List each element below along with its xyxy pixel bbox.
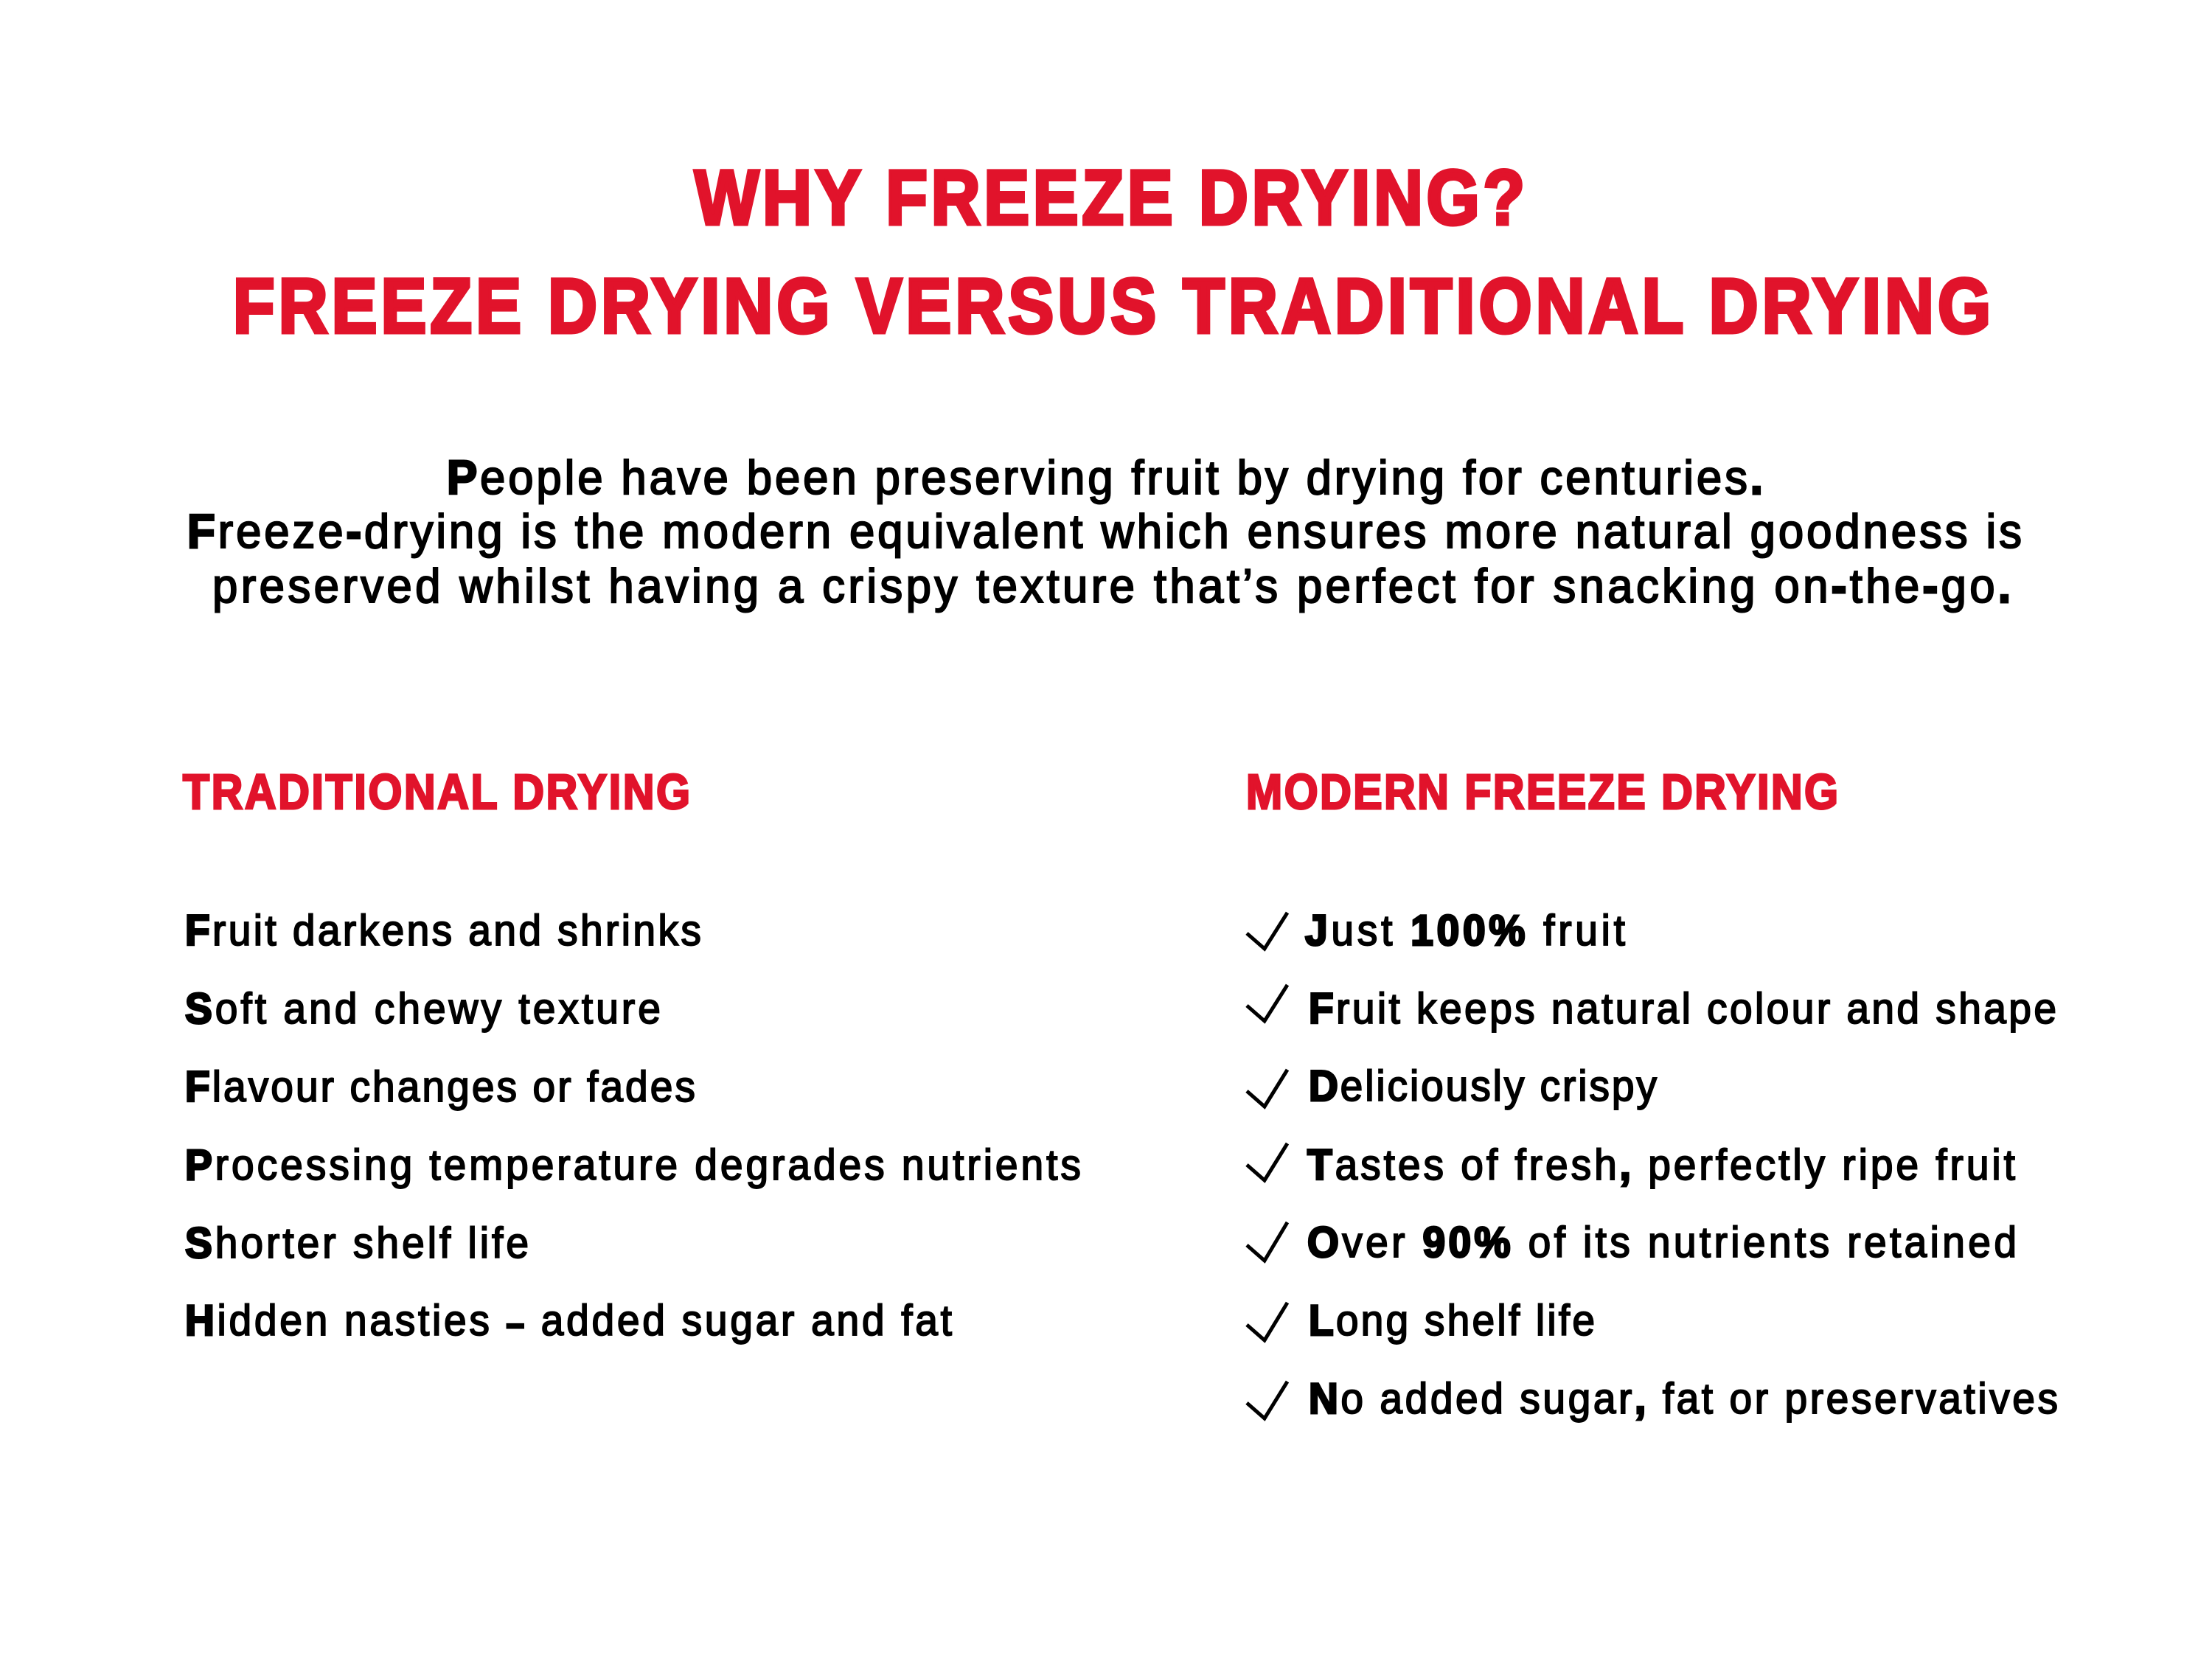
panel: modern freeze drying — [1246, 765, 2058, 1422]
intro paragraph: preserved whilst having a crispy texture that’s perfect for snacking on-the-go. — [212, 560, 2011, 613]
list: traditional drying points: Flavour changes or fades — [185, 1063, 695, 1110]
list: freeze drying benefits: Long shelf life — [1309, 1297, 1595, 1344]
title: WHY FREEZE DRYING? — [695, 153, 1525, 240]
list: freeze drying benefits: No added sugar, fat or preservatives — [1309, 1375, 2058, 1422]
list: traditional drying points — [185, 907, 1081, 1344]
list: traditional drying points: Soft and chewy texture — [185, 985, 661, 1032]
heading: traditional drying: TRADITIONAL DRYING — [183, 765, 690, 820]
list: freeze drying benefits: Deliciously crispy — [1309, 1062, 1658, 1110]
list: freeze drying benefits: Tastes of fresh, perfectly ripe fruit — [1307, 1141, 2015, 1188]
title: FREEZE DRYING VERSUS TRADITIONAL DRYING — [233, 262, 1991, 349]
intro paragraph: People have been preserving fruit by drying for centuries. — [447, 452, 1763, 504]
list: freeze drying benefits: Over 90% of its nutrients retained — [1307, 1219, 2017, 1266]
heading: modern freeze drying: MODERN FREEZE DRYING — [1246, 765, 1838, 820]
list: freeze drying benefits: Fruit keeps natural colour and shape — [1309, 985, 2056, 1032]
list: freeze drying benefits — [1305, 907, 2058, 1422]
list: traditional drying points: Shorter shelf life — [185, 1219, 529, 1267]
intro paragraph — [187, 452, 2022, 613]
list: traditional drying points: Fruit darkens and shrinks — [185, 907, 701, 954]
list: traditional drying points: Processing temperature degrades nutrients — [185, 1141, 1081, 1188]
panel: traditional drying — [183, 765, 1081, 1344]
intro paragraph: Freeze-drying is the modern equivalent which ensures more natural goodness is — [187, 506, 2022, 558]
title — [233, 153, 1991, 349]
list: traditional drying points: Hidden nasties – added sugar and fat — [185, 1297, 952, 1344]
list: freeze drying benefits: Just 100% fruit — [1305, 907, 1625, 954]
icons: check marks — [1247, 913, 1287, 1418]
